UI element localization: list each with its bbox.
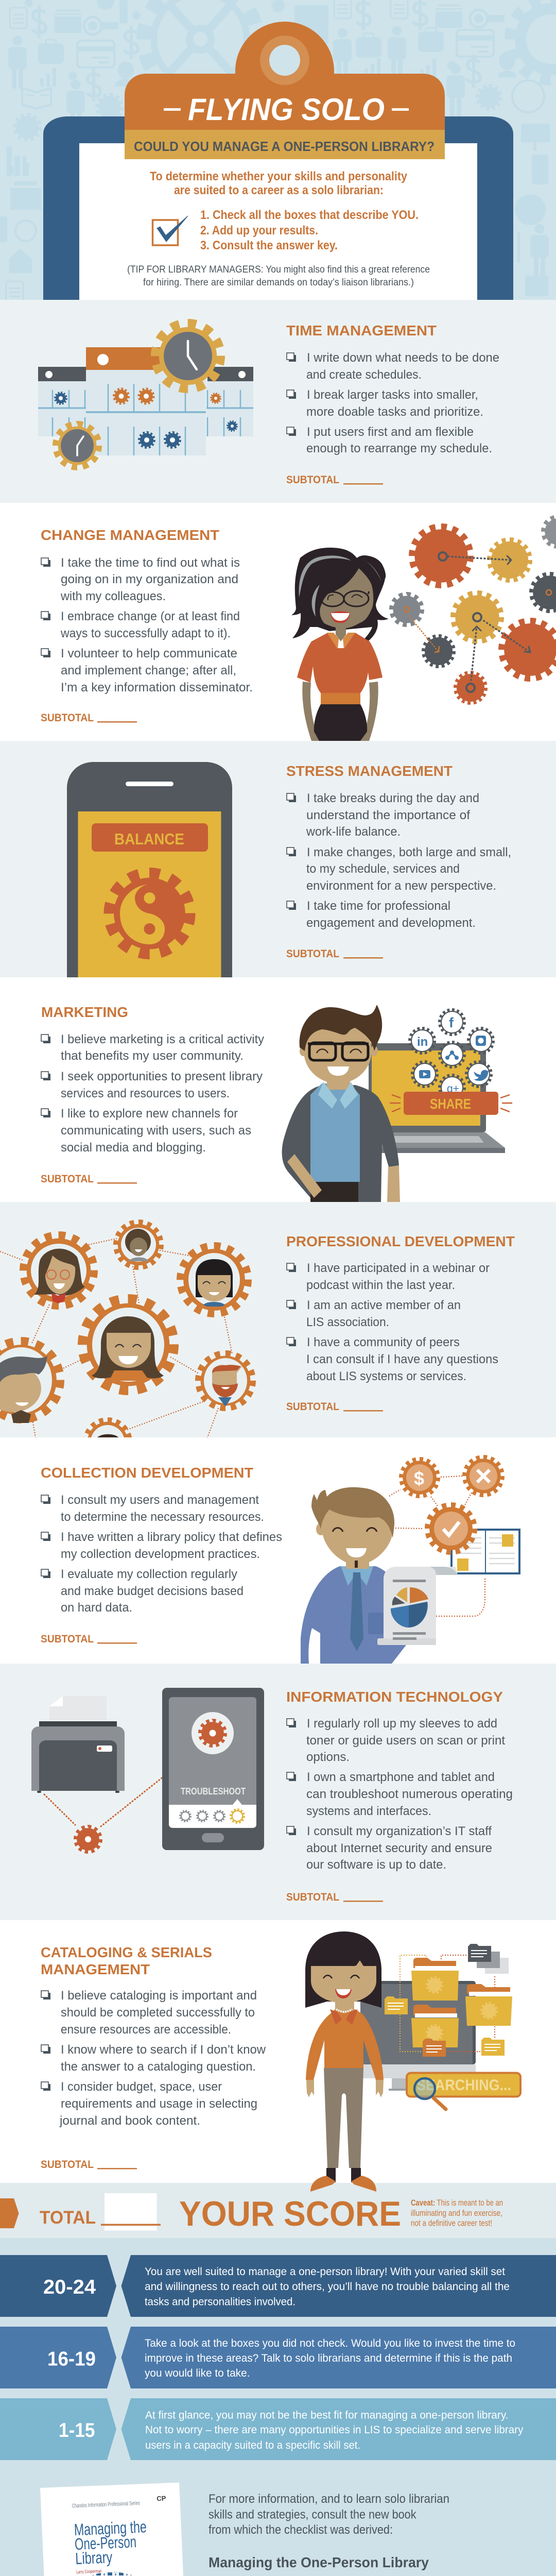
checklist: my collection development practices. [61,1547,260,1561]
button: balance: BALANCE [114,830,184,848]
checklist: options. [306,1750,350,1764]
answer key and footer area [0,2238,556,2576]
checklist: I am an active member of an [307,1298,461,1312]
panel: collection development [0,1437,556,1664]
heading: CATALOGING & SERIALS [41,1944,212,1960]
checklist: I make changes, both large and small, [307,845,511,859]
icon: dollar gear [402,1460,438,1496]
checklist: I write down what needs to be done [307,351,499,365]
icons: social media gears: in [417,1035,428,1049]
checklist: I consult my organization’s IT staff [307,1824,492,1838]
icon: report with pie chart [377,1567,458,1645]
checklist: I believe cataloging is important and [61,1989,257,2003]
checklist: more doable tasks and prioritize. [306,405,483,419]
score row 20-24: tasks and personalities involved. [145,2296,296,2308]
illustration: man with glasses [282,1005,400,1202]
score row 16-19 [0,2327,556,2388]
score row 16-19: 16-19 [47,2348,96,2370]
subtotal: SUBTOTAL [286,1891,339,1903]
more information text: skills and strategies, consult the new book [208,2508,416,2521]
heading: COLLECTION DEVELOPMENT [41,1465,253,1481]
illustration: printer [31,1696,125,1793]
score row 1-15: Not to worry – there are many opportunities in LIS to specialize and serve library [145,2424,524,2436]
book cover: Chandos Information Professional Series [72,2500,140,2509]
heading: TIME MANAGEMENT [286,323,437,338]
checklist: I volunteer to help communicate [61,647,237,660]
book citation: Managing the One-Person Library [208,2554,429,2570]
heading [41,1944,212,1977]
checklist [41,1493,282,1615]
panel: information technology [0,1664,556,1920]
checklist: ways to successfully adapt to it). [60,626,231,640]
checklist: I evaluate my collection regularly [61,1567,237,1581]
score row 1-15: users in a capacity suited to a specific skill set. [145,2439,360,2451]
checklist: I embrace change (or at least find [61,609,240,623]
checklist: journal and book content. [59,2114,200,2128]
checklist: I take time for professional [307,899,450,913]
score row 20-24: and willingness to reach out to others, you’ll have no trouble balancing all the [145,2281,510,2293]
checklist: and implement change; after all, [61,664,236,677]
dotted connectors [389,1476,485,1616]
checklist: I break larger tasks into smaller, [307,388,478,402]
more information text: from which the checklist was derived: [208,2523,393,2537]
more information text [208,2492,449,2537]
illustration: tablet troubleshoot: TROUBLESHOOT [181,1786,246,1797]
checklist: can troubleshoot numerous operating [306,1787,513,1801]
panel: score band background [0,2183,556,2238]
book cover: Larry Cooperman [76,2568,102,2574]
checklist: podcast within the last year. [306,1278,455,1292]
subtitle band [125,130,445,159]
score row 1-15: At first glance, you may not be the best fit for managing a one-person library. [145,2409,509,2421]
score row 16-19: you would like to take. [145,2367,250,2379]
checklist: I can consult if I have any questions [306,1352,498,1366]
header: clipboard with title [0,0,556,302]
icon: dollar gear: $ [414,1468,424,1489]
checklist: I’m a key information disseminator. [61,681,253,694]
checklist: ensure resources are accessible. [61,2023,231,2037]
heading: PROFESSIONAL DEVELOPMENT [286,1233,515,1249]
button: share [390,1092,512,1115]
checklist: toner or guide users on scan or print [306,1734,505,1748]
book cover: One-Person [74,2532,137,2553]
illustration: network of gears [391,517,556,703]
book cover [40,2482,188,2576]
score row 16-19: improve in these areas? Talk to solo librarians and determine if this is the path [145,2352,512,2364]
dotted connector [44,1749,199,1826]
checklist: that benefits my user community. [61,1049,244,1063]
caveat: illuminating and fun exercise, [411,2208,502,2218]
checklist: enough to rearrange my schedule. [306,442,492,455]
heading: INFORMATION TECHNOLOGY [286,1689,503,1705]
dotted file connectors [400,1955,495,2052]
checklist: to my schedule, services and [306,862,460,876]
illustration: tablet troubleshoot [162,1688,264,1850]
icon: gear [76,1827,100,1852]
checklist: I consult my users and management [61,1493,259,1507]
total label: TOTAL [40,2208,96,2228]
gear person: woman with long hair [84,1300,172,1389]
illustration: man with report [301,1487,411,1664]
icons: social media gears: g+ [447,1083,459,1095]
total score band [0,2193,503,2233]
paper sheet [79,143,477,300]
panel: professional development [0,1202,556,1437]
caveat: not a definitive career test! [411,2218,492,2228]
steps: 1. Check all the boxes that describe YOU. [200,208,419,222]
icon: big clock gear [155,324,220,388]
gear person: black bob [181,1247,247,1313]
checklist [41,1989,266,2128]
subtotal: SUBTOTAL [41,1173,94,1185]
your score heading: YOUR SCORE [179,2194,401,2233]
intro text: are suited to a career as a solo librarian: [174,183,384,197]
subtotal: SUBTOTAL [41,1633,94,1645]
gear person: red-bearded man [199,1354,252,1408]
gear person: woman with orange glasses [24,1236,93,1305]
tip for library managers: (TIP FOR LIBRARY MANAGERS: You might also find this a great reference [127,264,430,275]
checklist [287,791,511,930]
icons: social media gears: f [449,1015,454,1030]
illustration: monitor [360,1981,476,2091]
checklist: and make budget decisions based [61,1584,244,1598]
icon: checked box [152,216,188,245]
tip for library managers: for hiring. There are similar demands on today’s liaison librarians.) [143,277,414,288]
icon: orange arrow tab [0,2198,19,2228]
icon: yin-yang gear [110,874,189,953]
subtotal: SUBTOTAL [41,2159,94,2171]
checklist: our software is up to date. [306,1858,446,1872]
checklist: I know where to search if I don’t know [61,2043,266,2057]
icon: check gear [428,1505,474,1552]
clipboard board [43,116,513,300]
panel: change management [0,503,556,741]
heading: MANAGEMENT [41,1961,150,1977]
tip for library managers [127,264,430,288]
checklist: systems and interfaces. [306,1804,431,1818]
clip: title tab [125,22,445,130]
checklist: I believe marketing is a critical activity [61,1032,264,1046]
score row 16-19: Take a look at the boxes you did not check. Would you like to invest the time to [145,2337,515,2349]
checklist: I take the time to find out what is [61,556,240,570]
background pattern of library icons [0,0,556,302]
score row 20-24: You are well suited to manage a one-person library! With your varied skill set [145,2266,505,2278]
score row 1-15 [0,2398,556,2460]
steps [200,208,419,252]
checklist [287,351,499,455]
button: share: SHARE [430,1096,471,1112]
panel: cataloging and serials management [0,1920,556,2183]
icons: folders [385,1944,512,2057]
panel: time management [0,300,556,503]
heading: MARKETING [41,1004,128,1020]
book cover: Managing the [74,2517,147,2539]
icons: social media gears [410,1010,493,1100]
icon: book [450,1529,520,1574]
large background gear [145,0,256,95]
button: balance [92,823,208,852]
checklist: I like to explore new channels for [61,1107,238,1121]
subtotal: SUBTOTAL [41,712,94,724]
title: FLYING SOLO [188,92,385,127]
icon: x gear [465,1458,502,1495]
illustration: calendars and clock gears [38,324,253,467]
checklist: services and resources to users. [61,1087,230,1100]
heading: CHANGE MANAGEMENT [41,527,219,543]
gear person: partly visible, bottom [83,1417,132,1437]
subtitle band: COULD YOU MANAGE A ONE-PERSON LIBRARY? [134,139,435,154]
checklist: on hard data. [61,1601,132,1615]
gear person: curly hair [116,1223,161,1267]
checklist: communicating with users, such as [61,1124,251,1138]
checklist [287,1261,498,1383]
checklist: requirements and usage in selecting [61,2097,257,2111]
checklist: to determine the necessary resources. [61,1510,264,1524]
checklist: should be completed successfully to [61,2006,255,2020]
checklist: and create schedules. [306,368,422,382]
checklist: the answer to a cataloging question. [61,2060,256,2074]
subtotal: SUBTOTAL [286,1401,339,1413]
icon: small clock gear [56,424,99,467]
checklist: engagement and development. [306,916,476,930]
checklist [41,556,253,694]
search bar: SEARCHING... [416,2077,511,2094]
checklist: LIS association. [306,1315,389,1329]
caveat: Caveat: This is meant to be an [411,2198,503,2208]
panel: marketing [0,977,556,1202]
subtotal: SUBTOTAL [286,948,339,960]
checklist: work-life balance. [306,825,401,839]
checklist [287,1717,513,1872]
illustration: woman with glasses [291,548,389,741]
book cover: CP [157,2494,166,2502]
caveat [411,2198,503,2228]
checklist: I have participated in a webinar or [307,1261,490,1275]
checklist: about LIS systems or services. [306,1369,466,1383]
illustration: network of people in gears [0,1223,252,1464]
intro text [150,170,408,197]
illustration: smartphone with balance gear [67,762,232,977]
arrows between gears [409,556,530,680]
checklist: understand the importance of [306,808,470,822]
score row 1-15: 1-15 [59,2419,95,2442]
checklist: I regularly roll up my sleeves to add [307,1717,497,1731]
gear person: gray-haired man [0,1342,59,1423]
book cover: Library [75,2548,113,2568]
total write-in box [101,2193,161,2231]
checklist: I put users first and am flexible [307,425,474,439]
score row 20-24: 20-24 [43,2276,96,2298]
checklist: I consider budget, space, user [61,2080,222,2094]
checklist: I own a smartphone and tablet and [307,1770,495,1784]
steps: 2. Add up your results. [200,224,318,238]
illustration: woman's orange shoes [310,2176,376,2192]
score row 20-24 [0,2255,556,2317]
illustration: woman with black bob [305,1931,384,2182]
heading: STRESS MANAGEMENT [286,763,453,779]
intro text: To determine whether your skills and personality [150,170,408,183]
checklist: with my colleagues. [60,589,166,603]
checklist: about Internet security and ensure [306,1841,492,1855]
search bar [407,2073,520,2109]
icon: head made of library icons [73,2572,161,2576]
more information text: For more information, and to learn solo librarian [208,2492,449,2506]
illustration: laptop [369,1043,505,1153]
checklist: going on in my organization and [61,572,238,586]
steps: 3. Consult the answer key. [200,239,338,252]
checklist: I have a community of peers [307,1335,460,1349]
panel: stress management [0,741,556,977]
checklist: environment for a new perspective. [306,879,496,893]
checklist [41,1032,264,1155]
checklist: social media and blogging. [61,1141,206,1155]
checklist: I seek opportunities to present library [61,1070,263,1083]
icon: magnifying glass [414,2078,446,2109]
checklist: I take breaks during the day and [307,791,479,805]
checklist: I have written a library policy that defines [61,1530,282,1544]
subtotal: SUBTOTAL [286,474,339,486]
